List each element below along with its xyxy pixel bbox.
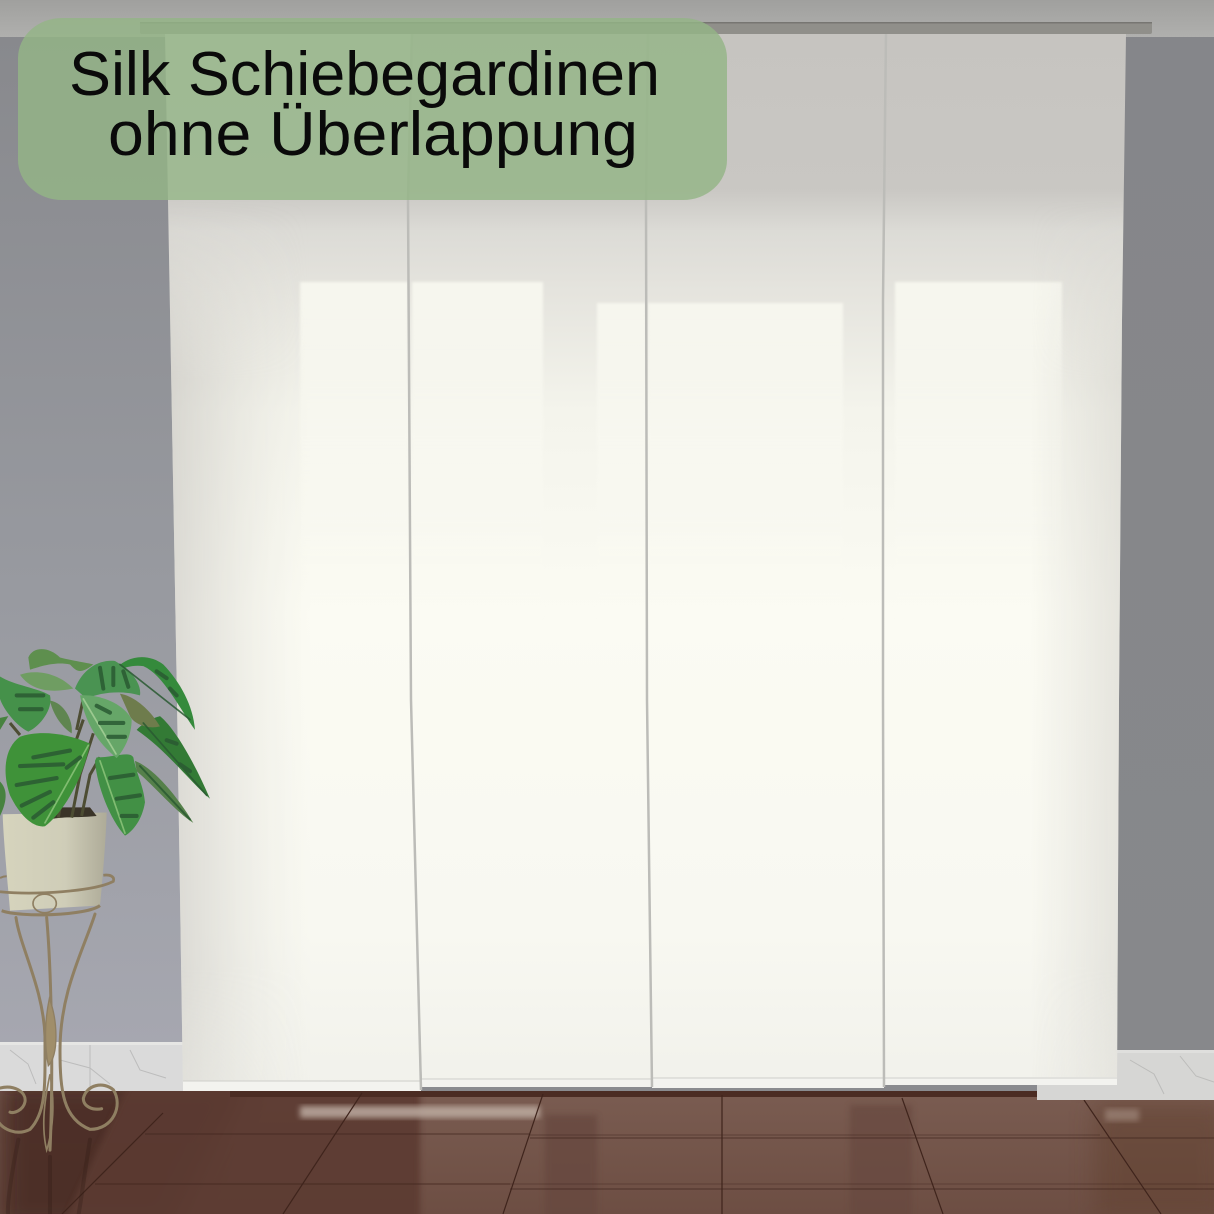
- floor reflections: [0, 1091, 128, 1214]
- wall right: [1100, 37, 1214, 1057]
- ceiling rail: [140, 22, 1152, 34]
- leaf veins: [17, 664, 207, 833]
- ceiling: [0, 0, 1214, 38]
- tile lines: [62, 1093, 1214, 1214]
- baseboard right: [1037, 1050, 1214, 1100]
- title text: [69, 40, 660, 169]
- curtain panel 2: [408, 30, 652, 1087]
- panel seams: [408, 30, 886, 1090]
- curtain panel 4: [883, 33, 1130, 1100]
- title text: Silk Schiebegardinen: [69, 40, 660, 109]
- title text: ohne Überlappung: [108, 100, 638, 169]
- wall left: [0, 37, 200, 1047]
- curtain panel 3: [646, 33, 886, 1088]
- plant pot: [0, 807, 114, 915]
- floor shadow strip: [230, 1091, 1037, 1097]
- floor: [0, 1080, 1214, 1214]
- stand reflection: [8, 1140, 90, 1214]
- stand legs: [0, 914, 117, 1150]
- baseboard left: [0, 1042, 250, 1092]
- curtain panel 1: [165, 37, 421, 1091]
- plant leaves: [0, 649, 210, 836]
- title pill: [18, 18, 727, 200]
- plant stand: [0, 914, 117, 1214]
- stand ring: [0, 875, 114, 915]
